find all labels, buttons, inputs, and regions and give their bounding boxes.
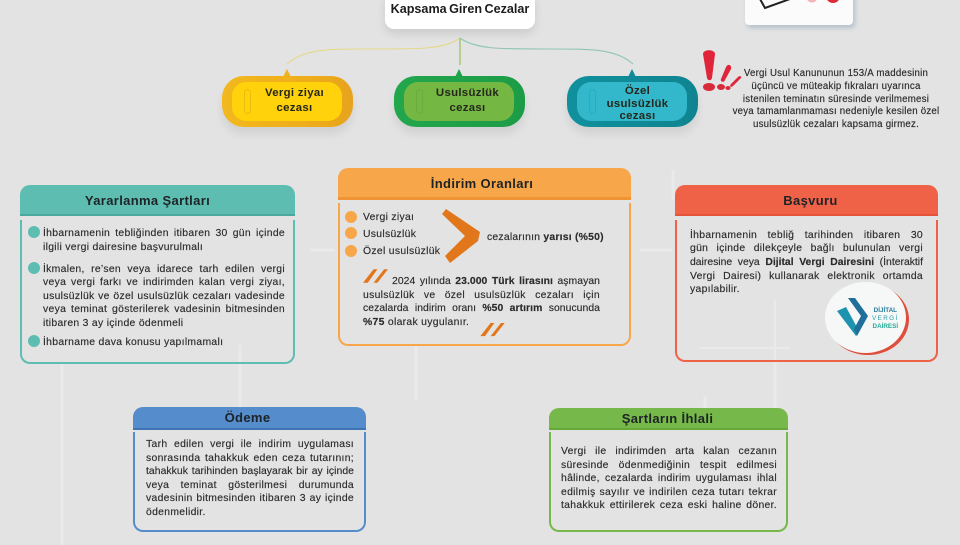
text: payment bbox=[146, 439, 354, 518]
text: payment: ödenmelidir. bbox=[146, 507, 206, 518]
panel: Başvuru bbox=[675, 185, 938, 362]
text: application: yapılabilir. bbox=[690, 284, 740, 295]
text: payment: vadesinin bitmesinden itibaren 3 ay içinde bbox=[146, 493, 354, 504]
text: application: dairesine veya Dijital Vergi Dairesini (İnteraktif bbox=[690, 257, 923, 268]
text: application: İhbarnamenin tebliğ tarihinden itibaren 30 bbox=[690, 230, 923, 241]
icon: opening quote bbox=[363, 269, 388, 283]
text: 2024 note bbox=[363, 276, 600, 328]
list of penalties bbox=[345, 211, 440, 257]
note text: istenilen teminatın süresinde verilmemesi bbox=[743, 94, 929, 105]
text: 2024 note: cezalarda indirim oranı %50 artırım sonucunda bbox=[363, 303, 600, 314]
icon: Dijital Vergi Dairesi logo: VERGİ bbox=[872, 315, 899, 322]
list of penalties: Özel usulsüzlük bbox=[363, 246, 440, 257]
bullets and text: usulsüzlük ve özel usulsüzlük cezaları vadesinde bbox=[43, 291, 285, 302]
icon: chevron bbox=[442, 209, 480, 263]
heading: Yararlanma Şartları: Yararlanma Şartları bbox=[85, 193, 210, 208]
pill: Vergi ziyaı cezası: Vergi ziyaı bbox=[265, 86, 324, 98]
text: payment: veya teminat gösterilmesi durumunda bbox=[146, 480, 354, 491]
bullets and text: İkmalen, re’sen veya idarece tarh edilen vergi bbox=[43, 264, 285, 275]
icon: exclamation marks bbox=[703, 50, 742, 91]
text: half of penalties: cezalarının yarısı (%50) bbox=[487, 232, 604, 243]
text: 2024 note: 2024 yılında 23.000 Türk lirasını aşmayan bbox=[392, 276, 600, 287]
pill: Özel usulsüzlük cezası bbox=[567, 76, 698, 127]
pill: Vergi ziyaı cezası bbox=[222, 76, 353, 127]
text: payment: tahakkuk tarihinden başlayarak bir ay içinde bbox=[146, 466, 354, 477]
pill: Vergi ziyaı cezası: cezası bbox=[276, 102, 312, 114]
heading: İndirim Oranları bbox=[338, 168, 631, 200]
note text: veya tamamlanmaması nedeniyle kesilen özel bbox=[733, 106, 939, 117]
text: violation: tahakkuk ettirilerek ceza eski haline döner. bbox=[561, 500, 777, 511]
panel: Yararlanma Şartları bbox=[20, 185, 295, 364]
icon: closing quote bbox=[480, 323, 505, 336]
bullets and text: İhbarname dava konusu yapılmamalı bbox=[43, 337, 223, 348]
note text: usulsüzlük cezaları kapsama girmez. bbox=[753, 119, 919, 130]
text: application: Vergi Dairesi) kullanarak elektronik ortamda bbox=[690, 271, 923, 282]
text: violation: edilmiş sayılır ve indirilen ceza tutarı tekrar bbox=[561, 487, 777, 498]
icon: Dijital Vergi Dairesi logo: DİJİTAL bbox=[874, 307, 897, 314]
text: violation bbox=[561, 446, 777, 511]
icon: Dijital Vergi Dairesi logo: DAİRESİ bbox=[873, 323, 898, 330]
pill: Özel usulsüzlük cezası: usulsüzlük bbox=[607, 98, 668, 110]
bullets and text: ilgili vergi dairesine başvurulmalı bbox=[43, 242, 203, 253]
bullets and text: veya vergi farkı ve indirimden kalan vergi ziyaı, bbox=[43, 277, 285, 288]
list of penalties: Usulsüzlük bbox=[363, 229, 416, 240]
heading: Şartların İhlali bbox=[549, 408, 788, 430]
panel: İndirim Oranları bbox=[338, 168, 631, 346]
bullets and text bbox=[28, 226, 285, 348]
text: application bbox=[690, 229, 924, 295]
bullets and text: veya teminat gösterilerek vadesinin bitmesinden bbox=[43, 304, 285, 315]
text: application: gün içinde dilekçeyle bağlı bulunulan vergi bbox=[690, 243, 923, 254]
text: 2024 note: usulsüzlük ve özel usulsüzlük cezaları için bbox=[363, 290, 600, 301]
bullets and text: İhbarnamenin tebliğinden itibaren 30 gün içinde bbox=[43, 228, 285, 239]
list of penalties: Vergi ziyaı bbox=[363, 212, 414, 223]
text: violation: süresinde ödenmediğinin tespit edilmesi bbox=[561, 460, 777, 471]
heading: Başvuru: Başvuru bbox=[783, 193, 838, 208]
text: violation: Vergi ile indirimden arta kalan cezanın bbox=[561, 446, 777, 457]
pill: Usulsüzlük cezası bbox=[394, 76, 525, 127]
panel: Şartların İhlali bbox=[549, 408, 788, 532]
heading: Yararlanma Şartları bbox=[20, 185, 295, 216]
heading: Ödeme bbox=[133, 407, 366, 430]
icon: envelope tile bbox=[745, 0, 853, 25]
icon: Dijital Vergi Dairesi logo bbox=[825, 282, 909, 355]
text: payment: sonrasında tahakkuk eden ceza tutarının; bbox=[146, 453, 354, 464]
title box: Kapsama Giren Cezalar bbox=[391, 2, 529, 16]
pill: Usulsüzlük cezası: cezası bbox=[450, 102, 486, 114]
heading: Başvuru bbox=[675, 185, 938, 216]
pill: Usulsüzlük cezası: Usulsüzlük bbox=[436, 86, 499, 98]
pill: Özel usulsüzlük cezası: cezası bbox=[620, 110, 656, 122]
text: payment: Tarh edilen vergi ile indirim uygulaması bbox=[146, 439, 354, 450]
text: 2024 note: %75 olarak uygulanır. bbox=[363, 317, 469, 328]
heading: İndirim Oranları: İndirim Oranları bbox=[431, 176, 533, 191]
tree connector lines bbox=[286, 38, 634, 65]
heading: Ödeme: Ödeme bbox=[225, 410, 270, 425]
text: violation: hâlinde, cezalarda indirim uygulaması ihlal bbox=[561, 473, 777, 484]
heading: Şartların İhlali: Şartların İhlali bbox=[622, 411, 713, 426]
bullets and text: itibaren 3 ay içinde ödenmeli bbox=[43, 318, 183, 329]
note text: üçüncü ve müteakip fıkraları uyarınca bbox=[751, 81, 921, 92]
note text: Vergi Usul Kanununun 153/A maddesinin bbox=[744, 68, 928, 79]
panel: Ödeme bbox=[133, 407, 366, 532]
pill: Özel usulsüzlük cezası: Özel bbox=[625, 85, 650, 97]
title box bbox=[385, 0, 535, 29]
note text bbox=[732, 68, 939, 130]
